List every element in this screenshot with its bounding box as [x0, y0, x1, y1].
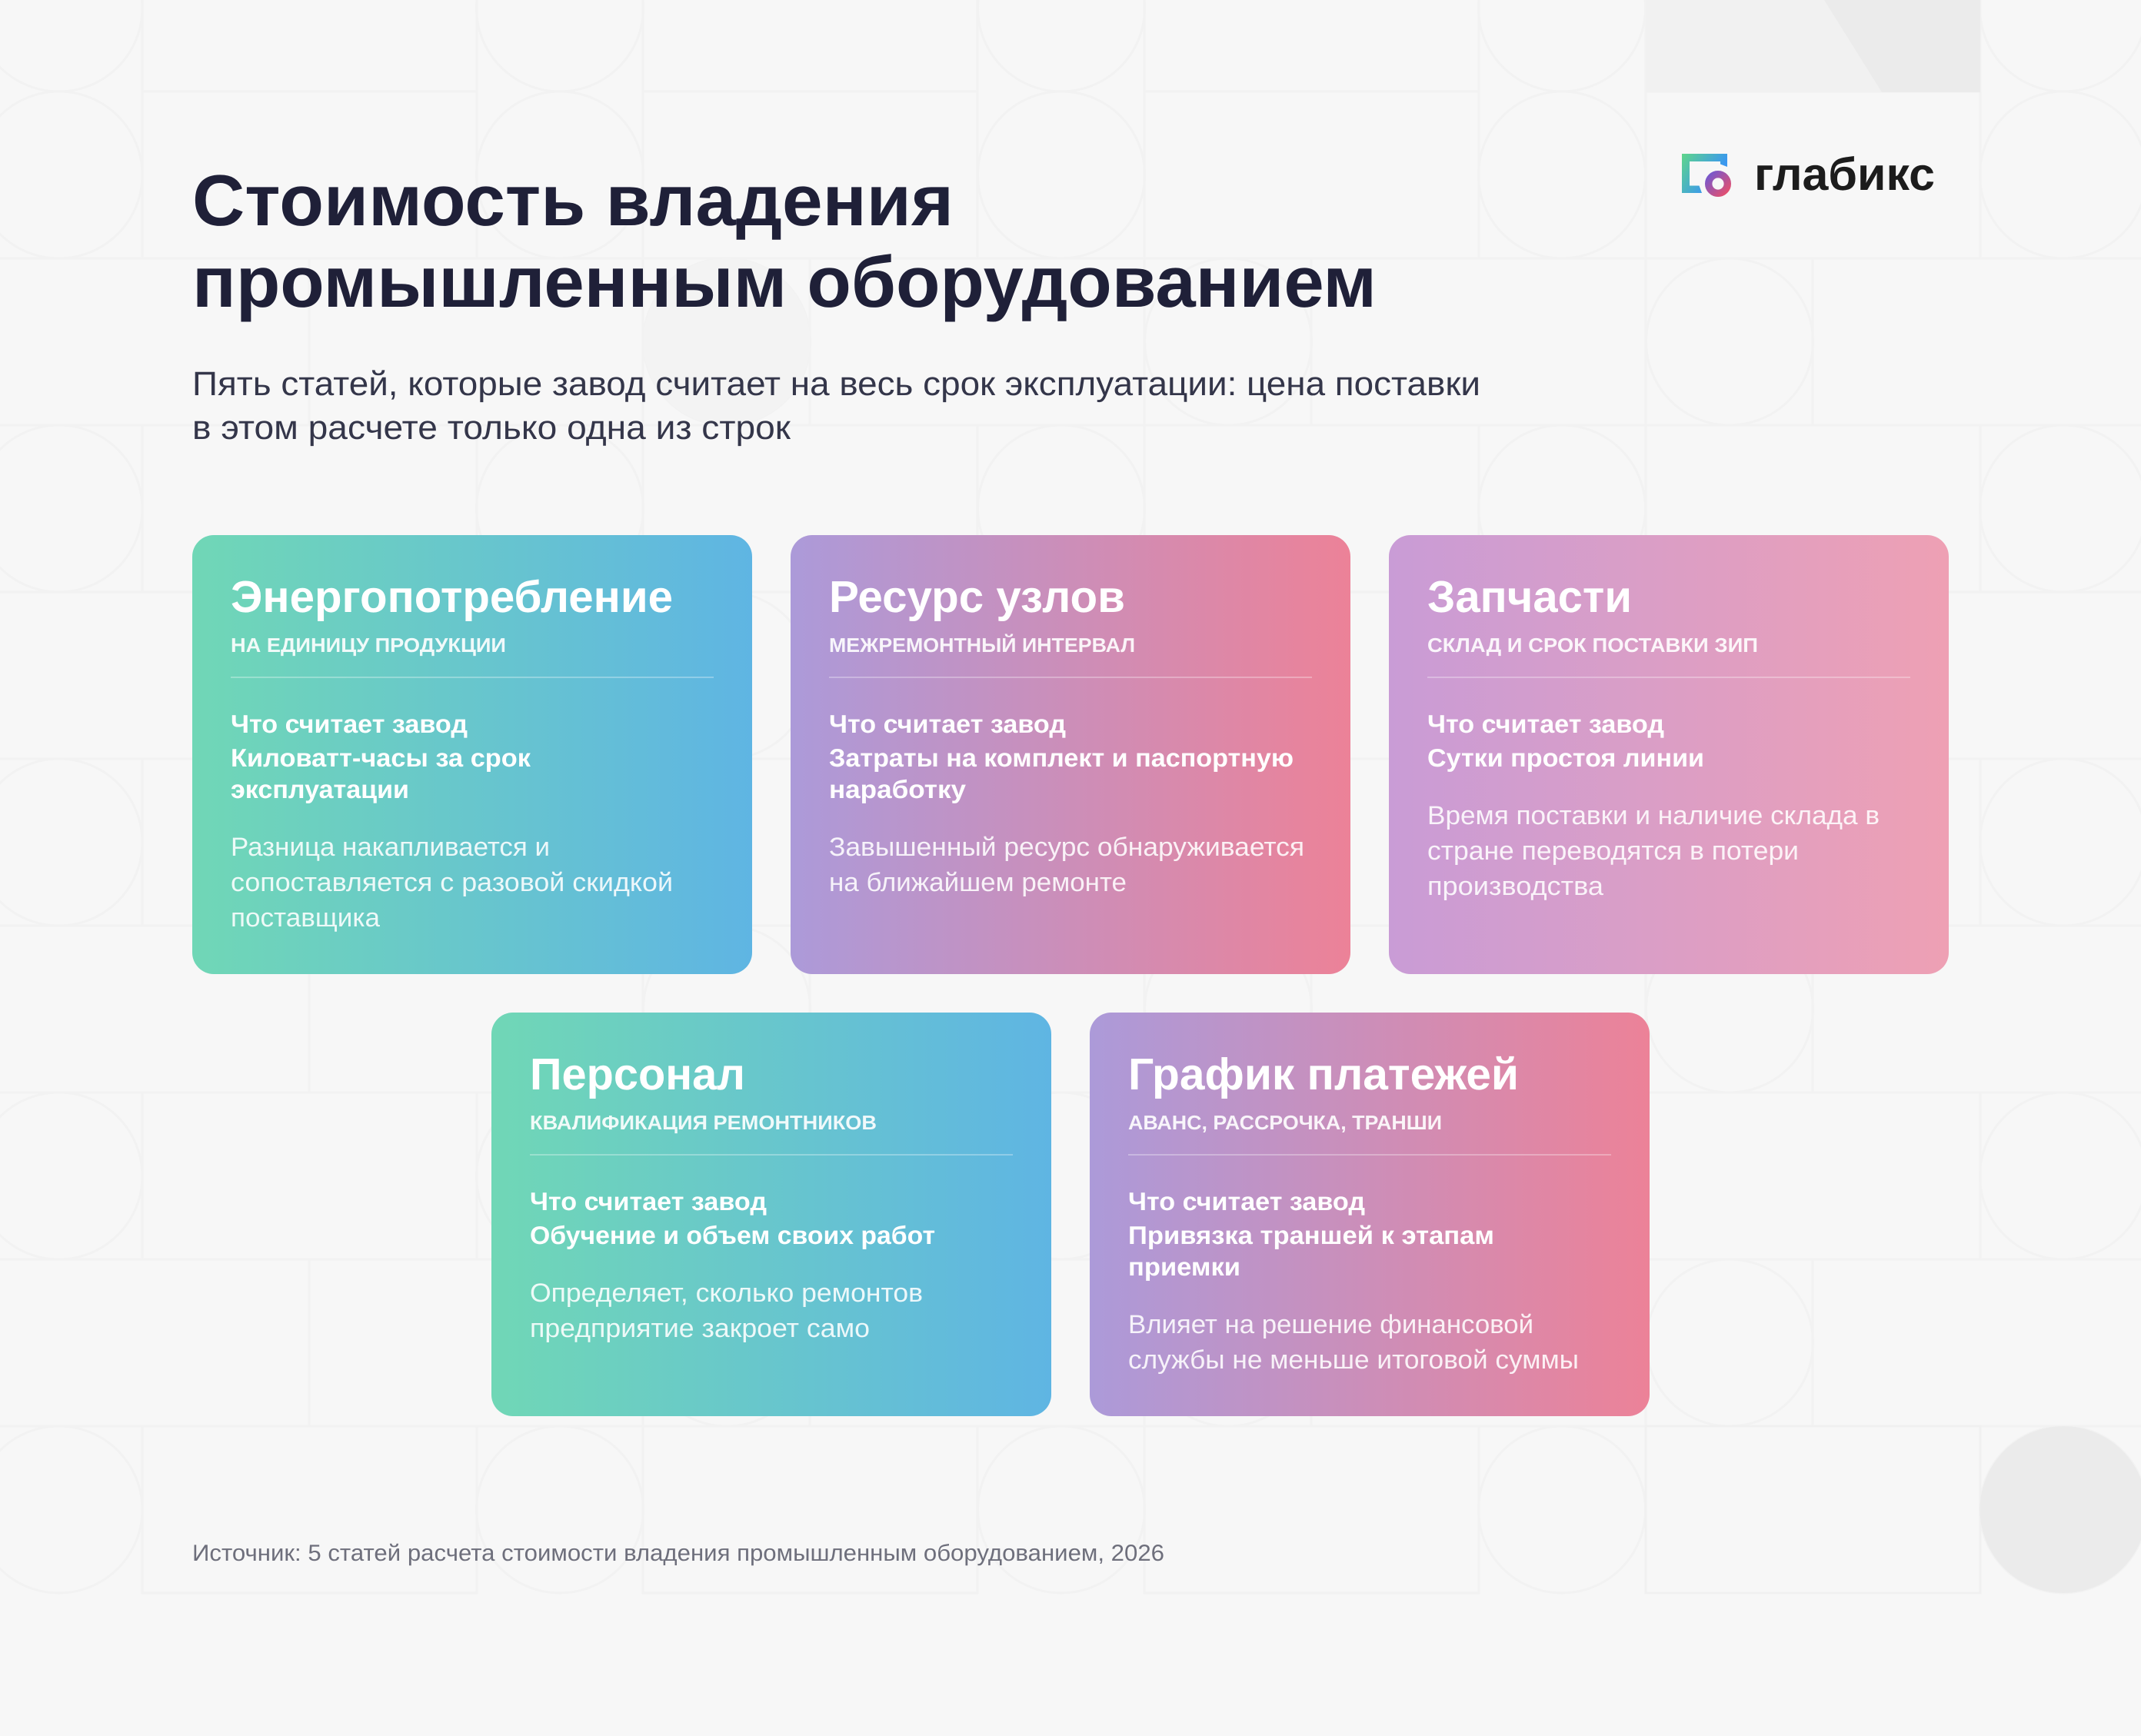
subtitle: в этом расчете только одна из строк	[192, 409, 791, 447]
card description	[1128, 1310, 1579, 1375]
what the plant counts: Что считает завод	[1128, 1187, 1365, 1216]
card description: стране переводятся в потери	[1427, 836, 1799, 866]
what the plant counts: Затраты на комплект и паспортную	[829, 743, 1294, 772]
logo	[1682, 148, 1935, 200]
card description: Влияет на решение финансовой	[1128, 1310, 1533, 1339]
what the plant counts	[530, 1187, 935, 1249]
title	[192, 160, 1377, 322]
card heading: Ресурс узлов	[829, 572, 1125, 622]
what the plant counts	[1427, 710, 1704, 772]
card heading: Энергопотребление	[231, 572, 673, 622]
what the plant counts: эксплуатации	[231, 775, 409, 803]
card subheading: КВАЛИФИКАЦИЯ РЕМОНТНИКОВ	[530, 1111, 877, 1134]
card description: предприятие закроет само	[530, 1314, 870, 1343]
what the plant counts	[829, 710, 1294, 803]
card heading: Запчасти	[1427, 572, 1632, 622]
panel: График платежей	[1090, 1013, 1650, 1416]
card heading: Персонал	[530, 1049, 745, 1099]
what the plant counts: Что считает завод	[1427, 710, 1664, 738]
card description: Определяет, сколько ремонтов	[530, 1279, 923, 1308]
panel: Энергопотребление	[192, 535, 752, 974]
what the plant counts: Что считает завод	[530, 1187, 767, 1216]
card description	[829, 833, 1304, 897]
card description: на ближайшем ремонте	[829, 868, 1127, 897]
logo wordmark: глабикс	[1754, 148, 1935, 200]
card subheading: НА ЕДИНИЦУ ПРОДУКЦИИ	[231, 634, 506, 657]
panel: Запчасти	[1389, 535, 1949, 974]
what the plant counts	[231, 710, 531, 803]
title: промышленным оборудованием	[192, 241, 1377, 322]
card description: Завышенный ресурс обнаруживается	[829, 833, 1304, 862]
what the plant counts: Что считает завод	[829, 710, 1066, 738]
subtitle: Пять статей, которые завод считает на весь срок эксплуатации: цена поставки	[192, 365, 1480, 403]
what the plant counts	[1128, 1187, 1494, 1281]
what the plant counts: Сутки простоя линии	[1427, 743, 1704, 772]
card description: Время поставки и наличие склада в	[1427, 801, 1880, 830]
card description	[1427, 801, 1880, 901]
what the plant counts: Обучение и объем своих работ	[530, 1221, 935, 1249]
card description	[231, 833, 673, 933]
card description: Разница накапливается и	[231, 833, 550, 862]
title: Стоимость владения	[192, 160, 954, 241]
panel: Ресурс узлов	[791, 535, 1350, 974]
what the plant counts: Киловатт-часы за срок	[231, 743, 531, 772]
what the plant counts: приемки	[1128, 1252, 1240, 1281]
card subheading: АВАНС, РАССРОЧКА, ТРАНШИ	[1128, 1111, 1442, 1134]
card description: службы не меньше итоговой суммы	[1128, 1345, 1579, 1375]
card description	[530, 1279, 923, 1343]
what the plant counts: Привязка траншей к этапам	[1128, 1221, 1494, 1249]
card description: поставщика	[231, 903, 380, 933]
card heading: График платежей	[1128, 1049, 1519, 1099]
panel: Персонал	[491, 1013, 1051, 1416]
source note: Источник: 5 статей расчета стоимости владения промышленным оборудованием, 2026	[192, 1541, 1164, 1566]
card subheading: МЕЖРЕМОНТНЫЙ ИНТЕРВАЛ	[829, 634, 1135, 657]
subtitle	[192, 365, 1480, 447]
card subheading: СКЛАД И СРОК ПОСТАВКИ ЗИП	[1427, 634, 1758, 657]
card description: производства	[1427, 872, 1603, 901]
what the plant counts: Что считает завод	[231, 710, 468, 738]
what the plant counts: наработку	[829, 775, 967, 803]
icon: logo mark	[1682, 154, 1727, 193]
card description: сопоставляется с разовой скидкой	[231, 868, 673, 897]
